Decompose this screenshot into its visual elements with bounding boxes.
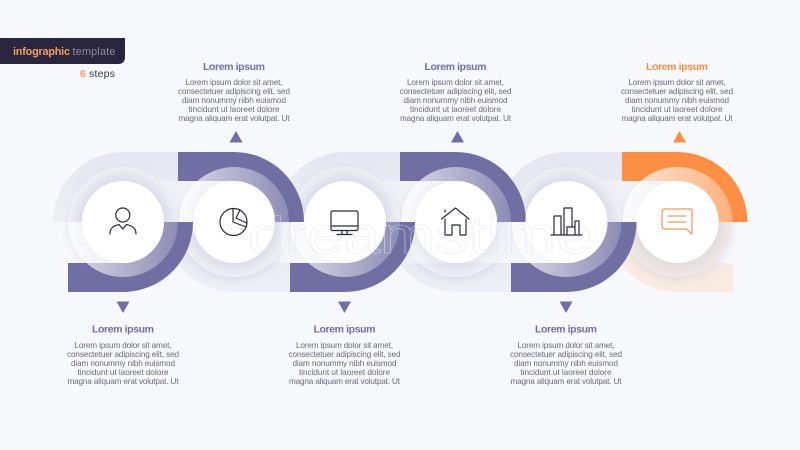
step 1 text: diam nonummy nibh euismod [71, 359, 175, 368]
step 4 arrow [451, 131, 464, 142]
step 1 text: Lorem ipsum dolor sit amet, [74, 341, 172, 350]
step 4 text: Lorem ipsum dolor sit amet, [407, 78, 504, 87]
step 5 text: diam nonummy nibh euismod [514, 359, 618, 368]
icon: person [110, 208, 136, 234]
step 2 text: diam nonummy nibh euismod [182, 96, 286, 105]
step 1 text: tincidunt ut laoreet dolore [78, 368, 169, 377]
step 6 text: consectetuer adipiscing elit, sed [621, 87, 733, 96]
peach tint on last ring [622, 222, 732, 277]
step 6 text [621, 61, 733, 123]
step 1 text: magna aliquam erat volutpat. Ut [68, 377, 179, 386]
icon: house [442, 208, 469, 235]
title tag: steps [89, 68, 115, 80]
step 4 text: Lorem ipsum [424, 61, 486, 73]
step 4 text: magna aliquam erat volutpat. Ut [400, 114, 512, 123]
title tag: infographic [13, 46, 70, 58]
step 6 text: Lorem ipsum dolor sit amet, [628, 78, 726, 87]
step 3 arrow [338, 302, 351, 313]
step 1 text: Lorem ipsum [92, 324, 154, 336]
step 6 text: diam nonummy nibh euismod [625, 96, 729, 105]
step 3 text: consectetuer adipiscing elit, sed [288, 350, 401, 359]
light orange arc [608, 222, 733, 292]
step 5 text: Lorem ipsum [535, 324, 597, 336]
step 2 text [178, 61, 290, 123]
icon: chat bubble [662, 209, 692, 234]
step 4 text: tincidunt ut laoreet dolore [410, 105, 501, 114]
dark arc: step 1 [68, 222, 193, 292]
title tag [0, 38, 125, 80]
icon: city buildings [551, 208, 582, 235]
step 5 text [510, 324, 622, 386]
step 3 text: tincidunt ut laoreet dolore [299, 368, 390, 377]
step 5 text: magna aliquam erat volutpat. Ut [510, 377, 622, 386]
step 6 text: magna aliquam erat volutpat. Ut [622, 114, 733, 123]
orange arc: step 6 [622, 152, 748, 222]
step 3 text [288, 324, 401, 386]
icon: monitor [331, 211, 358, 234]
step 3 text: Lorem ipsum dolor sit amet, [296, 341, 393, 350]
icon: pie chart [220, 208, 247, 236]
step 4 text: consectetuer adipiscing elit, sed [400, 87, 512, 96]
step 1 text [67, 324, 179, 386]
step 5 text: tincidunt ut laoreet dolore [520, 368, 612, 377]
step 1 text: consectetuer adipiscing elit, sed [67, 350, 179, 359]
dark arc: step 4 [400, 152, 526, 222]
white circles [82, 181, 718, 263]
step 2 text: magna aliquam erat volutpat. Ut [178, 114, 290, 123]
step 2 text: consectetuer adipiscing elit, sed [178, 87, 290, 96]
central whitish band [123, 181, 678, 263]
dark arc: step 3 [290, 222, 415, 292]
step 4 text: diam nonummy nibh euismod [404, 96, 508, 105]
step 2 text: Lorem ipsum [203, 61, 265, 73]
step 5 text: consectetuer adipiscing elit, sed [510, 350, 622, 359]
step 3 text: diam nonummy nibh euismod [292, 359, 397, 368]
soft ring shadows [69, 170, 732, 280]
title tag: template [72, 46, 116, 58]
step 2 arrow [230, 131, 242, 142]
title tag: 6 [80, 68, 86, 80]
step 5 arrow [560, 302, 572, 313]
step 1 arrow [116, 302, 130, 313]
step 2 text: tincidunt ut laoreet dolore [188, 105, 280, 114]
light arcs [53, 152, 622, 292]
dark arc: step 2 [178, 152, 304, 222]
translucent ring overlays [68, 167, 732, 277]
dark arc: step 5 [511, 222, 636, 292]
step 3 text: Lorem ipsum [314, 324, 376, 336]
step 6 text: Lorem ipsum [646, 61, 708, 73]
step 3 text: magna aliquam erat volutpat. Ut [289, 377, 401, 386]
step 4 text [400, 61, 512, 123]
watermark: dreamstime [248, 207, 593, 265]
step 6 arrow [673, 131, 686, 142]
step 2 text: Lorem ipsum dolor sit amet, [186, 78, 282, 87]
light rings [68, 167, 732, 277]
pale band behind watermark [280, 223, 610, 263]
step 5 text: Lorem ipsum dolor sit amet, [518, 341, 614, 350]
step 6 text: tincidunt ut laoreet dolore [632, 105, 723, 114]
